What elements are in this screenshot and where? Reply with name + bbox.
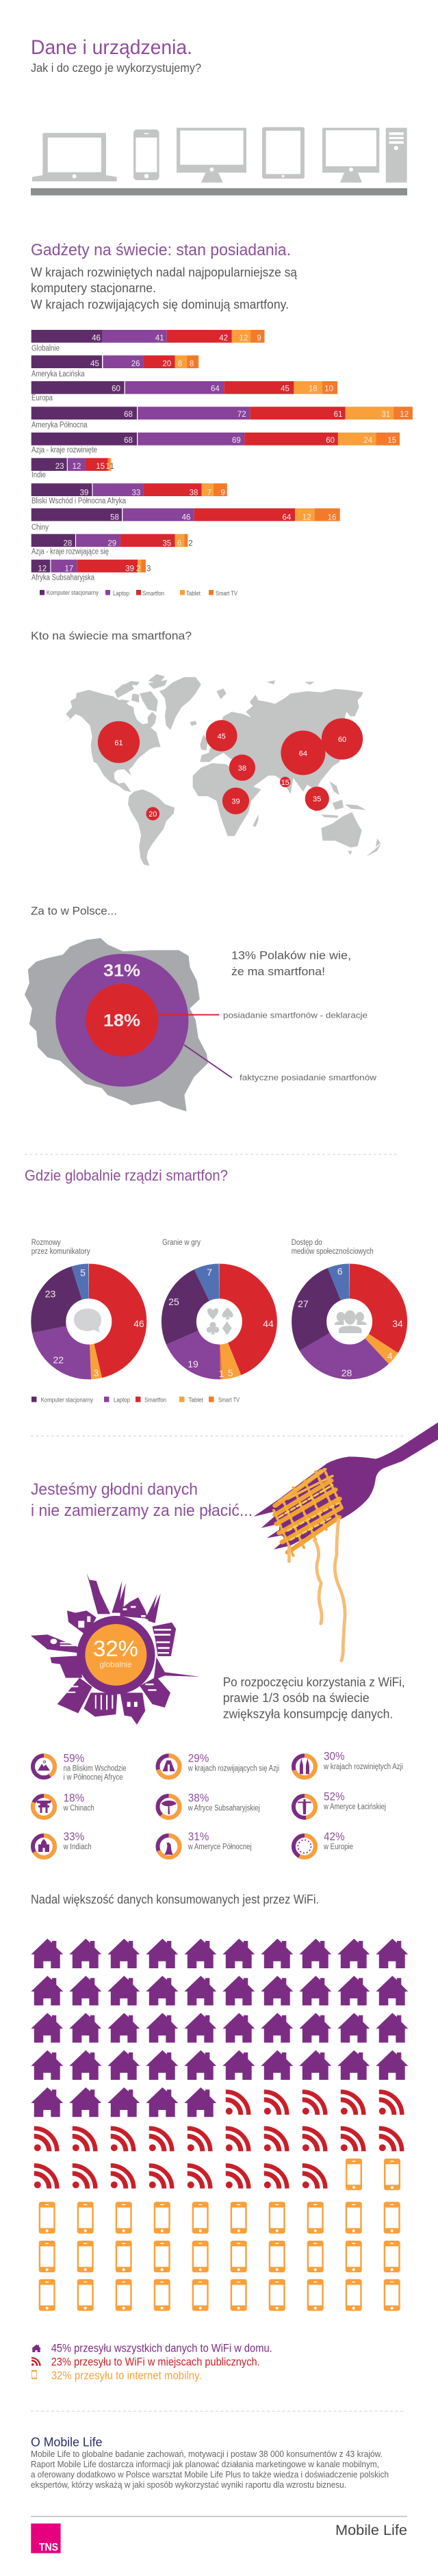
bubble: China 64: [281, 731, 325, 775]
values: 6: [337, 1266, 343, 1277]
illustration: fork with data noodles: [254, 1422, 438, 1661]
hanging strand B: [335, 1519, 345, 1661]
values: 3: [94, 1367, 99, 1378]
row: Ameryka Łacińska: 26: [131, 360, 140, 368]
row: Ameryka Północna: [31, 407, 413, 429]
value: 18%: 18%: [103, 1011, 140, 1030]
row: Ameryka Północna: 12: [400, 411, 409, 419]
stat: 38% Sub-Saharan Africa: 38%: [188, 1792, 209, 1805]
row: Ameryka Północna: Ameryka Północna: [31, 421, 88, 429]
icon: people: [335, 1310, 367, 1333]
logo: TNS: [31, 2523, 61, 2553]
callout: WiFi consumption: [223, 1675, 405, 1721]
row: Chiny: 46: [182, 514, 190, 522]
stacked bar chart: [31, 330, 413, 597]
about text: Raport Mobile Life dostarcza informacji jak planować działania marketingowe w kanale mobilnym,: [31, 2460, 379, 2469]
bubble: developed Asia 60: [322, 719, 363, 760]
bubble: developing Asia 35: 35: [313, 795, 321, 803]
row: Indie: 1: [105, 463, 110, 471]
legend: mobile internet: 32% przesyłu to internet mobilny.: [51, 2369, 202, 2382]
bubble: North America 61: [98, 721, 140, 763]
row: Azja - kraje rozwijające się: 28: [64, 539, 72, 548]
row: Ameryka Północna: 68: [124, 411, 133, 419]
stat: 29% developing Asia: w krajach rozwijających się Azji: [188, 1764, 279, 1773]
row: Ameryka Łacińska: 45: [90, 360, 99, 368]
leader line: declared: [159, 1014, 219, 1016]
row: Bliski Wschód i Północna Afryka: [31, 483, 227, 505]
bar chart legend: Smartfon: [142, 590, 164, 597]
intro paragraph: W krajach rozwijających się dominują smartfony.: [31, 297, 289, 311]
icon: smartphone: [133, 129, 159, 180]
bubble: China 64: 64: [299, 750, 307, 758]
row: Indie: 23: [55, 463, 64, 471]
logo: TNS: TNS: [39, 2542, 58, 2553]
stat: 29% developing Asia: 29%: [188, 1751, 209, 1764]
map: continents: [62, 674, 381, 866]
bubble: developing Asia 35: [305, 786, 329, 811]
icon: card suits: [207, 1307, 233, 1335]
donut label: Rozmowy: [31, 1239, 61, 1247]
donut legend: Smart TV: [218, 1396, 240, 1404]
row: Azja - kraje rozwijające się: 35: [162, 539, 171, 548]
icon: desktop monitor: [177, 128, 246, 183]
bubble: Africa 39: 39: [231, 798, 240, 806]
stat: 30% developed Asia: [294, 1750, 403, 1777]
stat: 38% Sub-Saharan Africa: [157, 1792, 260, 1818]
donut label: przez komunikatory: [31, 1248, 90, 1256]
icon: laptop: [32, 133, 117, 181]
row: Azja - kraje rozwijające się: 2: [188, 539, 193, 548]
Poland diagram: [25, 938, 232, 1111]
row: Azja - kraje rozwinięte: 60: [326, 437, 335, 445]
donut slices: [49, 1281, 129, 1362]
values: 7: [207, 1267, 212, 1278]
value: 32%: 32%: [93, 1636, 138, 1661]
values: 23: [45, 1288, 55, 1299]
row: Indie: 1: [110, 463, 114, 471]
orange disc: [85, 1624, 146, 1686]
fork: [254, 1422, 438, 1549]
world map: [62, 674, 381, 866]
stat: 59% Middle East and North Africa: [33, 1751, 127, 1782]
row: Ameryka Łacińska: 8: [190, 360, 194, 368]
intro paragraph: komputery stacjonarne.: [31, 281, 156, 295]
row: Globalnie: 42: [219, 334, 228, 342]
bubble: South America 20: [146, 807, 159, 821]
landmark window details: [50, 1606, 171, 1710]
row: Afryka Subsaharyjska: 12: [38, 565, 47, 574]
heading: where smartphones rule: Gdzie globalnie rządzi smartfon?: [25, 1167, 228, 1184]
about text: ekspertów, którzy wskażą w jaki sposób wykorzystać wyniki raportu dla wzrostu biznesu.: [31, 2480, 346, 2490]
callout: WiFi consumption: prawie 1/3 osób na świecie: [223, 1690, 370, 1705]
bar chart legend: Laptop: [113, 590, 129, 597]
values: [168, 1267, 274, 1379]
row: Chiny: 64: [283, 514, 292, 522]
stat: 59% Middle East and North Africa: 59%: [64, 1751, 84, 1764]
shelf: [31, 188, 407, 196]
values: 5: [228, 1367, 233, 1378]
row: Azja - kraje rozwijające się: 29: [107, 539, 116, 548]
stat: 59% Middle East and North Africa: na Bliskim Wschodzie: [64, 1764, 127, 1773]
bar chart legend: Tablet: [186, 590, 201, 597]
values: 46: [133, 1318, 144, 1329]
donut slices: [309, 1281, 390, 1362]
heading: who owns a smartphone: Kto na świecie ma smartfona?: [31, 630, 192, 643]
row: Globalnie: 46: [92, 334, 101, 342]
donut label: Dostęp do: [292, 1239, 322, 1247]
values: 1: [219, 1368, 224, 1379]
heading: gadgets: Gadżety na świecie: stan posiadania.: [31, 241, 291, 259]
donut: social media: [292, 1239, 403, 1378]
stat: 31% North America: w Ameryce Północnej: [188, 1843, 252, 1851]
row: Azja - kraje rozwijające się: [31, 534, 193, 556]
row: Azja - kraje rozwijające się: Azja - kraje rozwijające się: [31, 548, 109, 556]
row: Chiny: [31, 508, 340, 532]
about text: Mobile Life to globalne badanie zachowań, motywacji i postaw 38 000 konsumentów z 43 krajów.: [31, 2449, 383, 2459]
about text: a oferowany dodatkowo w Polsce warsztat Mobile Life Plus to także wiedza i doświadczenie polskich: [31, 2470, 389, 2480]
map: Poland: [25, 938, 208, 1111]
donut legend: Komputer stacjonarny: [41, 1396, 93, 1404]
row: Indie: Indie: [31, 472, 46, 480]
callout: WiFi consumption: zwiększyła konsumpcję danych.: [223, 1707, 393, 1721]
icon: desktop computer: [322, 128, 407, 183]
pictogram legend: [31, 2342, 272, 2382]
stat: 42% Europe: w Europie: [323, 1843, 353, 1851]
row: Globalnie: 12: [240, 334, 248, 342]
bubble: Middle East 38: [229, 754, 255, 781]
row: Azja - kraje rozwinięte: Azja - kraje rozwinięte: [31, 446, 97, 454]
stat: 31% North America: 31%: [188, 1830, 209, 1843]
stat: 33% India: [33, 1830, 92, 1857]
row: Ameryka Północna: 31: [381, 411, 390, 419]
callout: 13% of Poles: że ma smartfona!: [231, 965, 325, 978]
wifi signals: 23: [34, 2091, 402, 2189]
heading: hungry for data: i nie zamierzamy za nie płacić...: [31, 1502, 253, 1520]
stat: 29% developing Asia: [157, 1751, 279, 1777]
legend: home WiFi: 45% przesyłu wszystkich danych to WiFi w domu.: [51, 2342, 272, 2355]
row: Afryka Subsaharyjska: Afryka Subsaharyjska: [31, 574, 94, 582]
bubble: Middle East 38: 38: [238, 764, 246, 773]
row: Indie: 12: [73, 463, 81, 471]
stat: 42% Europe: [294, 1830, 353, 1857]
row: Ameryka Łacińska: [31, 355, 198, 378]
donut: games: [162, 1239, 274, 1379]
row: Indie: 15: [96, 463, 105, 471]
values: 22: [53, 1354, 64, 1365]
bubble: developed Asia 60: 60: [338, 736, 346, 744]
stat: 52% Latin America: 52%: [324, 1790, 345, 1803]
row: Afryka Subsaharyjska: 17: [65, 565, 73, 574]
row: Ameryka Północna: 61: [334, 411, 342, 419]
hanging strand A: [314, 1540, 322, 1624]
row: Europa: [31, 381, 337, 402]
heading: hungry for data: [31, 1480, 253, 1520]
pictogram grid: [31, 1939, 408, 2311]
label: actual ownership: faktyczne posiadanie smartfonów: [240, 1072, 376, 1082]
heading: Poland: Za to w Polsce...: [31, 905, 117, 918]
device icons row: [31, 127, 407, 196]
bubble: India 15: [280, 777, 290, 787]
donut label: [292, 1239, 374, 1256]
row: Azja - kraje rozwinięte: 69: [232, 437, 241, 445]
bubble: Europe 45: 45: [218, 732, 226, 740]
stat: 31% North America: [157, 1830, 252, 1857]
row: Azja - kraje rozwinięte: [31, 433, 400, 454]
about text: [31, 2449, 389, 2490]
icon: speech bubble: [74, 1309, 101, 1332]
stat: 18% China: 18%: [64, 1792, 84, 1805]
row: Europa: 60: [112, 385, 120, 393]
bar chart legend: Komputer stacjonarny: [47, 589, 99, 597]
landmarks: [31, 1573, 200, 1725]
row: Afryka Subsaharyjska: [31, 560, 151, 582]
row: Globalnie: 41: [155, 334, 164, 342]
row: Azja - kraje rozwijające się: 6: [177, 539, 181, 548]
row: Bliski Wschód i Północna Afryka: 33: [132, 489, 140, 497]
row: Bliski Wschód i Północna Afryka: Bliski Wschód i Północna Afryka: [31, 497, 127, 505]
donut label: mediów społecznościowych: [292, 1248, 374, 1256]
bar chart legend: [40, 589, 238, 597]
value: 31%: 31%: [103, 962, 140, 981]
row: Chiny: Chiny: [31, 524, 49, 532]
row: Globalnie: 9: [257, 334, 261, 342]
circle: declared ownership: [86, 984, 158, 1057]
row: Chiny: 16: [328, 514, 336, 522]
icon: tablet: [262, 127, 305, 179]
donut label: Granie w gry: [162, 1239, 201, 1247]
stat: 52% Latin America: w Ameryce Łacińskiej: [323, 1803, 386, 1812]
heading: most data over WiFi: Nadal większość danych konsumowanych jest przez WiFi.: [31, 1893, 319, 1907]
donut legend: Tablet: [189, 1396, 203, 1404]
values: 44: [263, 1318, 274, 1329]
donut label: [31, 1239, 90, 1256]
label: globalnie: globalnie: [100, 1660, 132, 1669]
bubble: Europe 45: [206, 720, 237, 751]
stat: 52% Latin America: [294, 1790, 386, 1818]
regional stats grid: [33, 1750, 403, 1857]
row: Ameryka Łacińska: 20: [162, 360, 171, 368]
row: Afryka Subsaharyjska: 39: [125, 565, 134, 574]
row: Azja - kraje rozwinięte: 24: [363, 437, 373, 445]
row: Globalnie: [31, 330, 264, 352]
stat: 18% China: [33, 1792, 94, 1818]
values: 28: [342, 1367, 352, 1378]
row: Europa: Europa: [31, 394, 53, 402]
row: Bliski Wschód i Północna Afryka: 7: [207, 489, 211, 497]
row: Bliski Wschód i Północna Afryka: 9: [221, 489, 225, 497]
intro paragraph: W krajach rozwiniętych nadal najpopularniejsze są: [31, 265, 298, 279]
bubble: South America 20: 20: [149, 810, 157, 819]
row: Europa: 18: [309, 385, 318, 393]
label: declared ownership: posiadanie smartfonów - deklaracje: [223, 1010, 368, 1020]
bubble: Africa 39: [222, 788, 249, 814]
bubble: North America 61: 61: [114, 739, 123, 747]
values: [298, 1266, 403, 1378]
intro paragraph: [31, 265, 298, 311]
houses: 45: [31, 1939, 408, 2117]
callout: 13% of Poles: [231, 949, 351, 978]
subtitle: Jak i do czego je wykorzystujemy?: [31, 61, 201, 75]
row: Europa: 64: [211, 385, 220, 393]
row: Azja - kraje rozwinięte: 68: [124, 437, 133, 445]
stat: 38% Sub-Saharan Africa: w Afryce Subsaharyjskiej: [188, 1805, 260, 1813]
bar chart legend: Smart TV: [216, 590, 238, 597]
row: Azja - kraje rozwinięte: 15: [387, 437, 396, 445]
heading: about Mobile Life: O Mobile Life: [31, 2435, 103, 2449]
noodle tangle: [274, 1469, 345, 1661]
row: Afryka Subsaharyjska: 3: [146, 565, 151, 574]
values: 27: [298, 1298, 309, 1309]
row: Chiny: 58: [110, 514, 119, 522]
donut slices: [179, 1281, 259, 1362]
row: Ameryka Łacińska: 8: [178, 360, 182, 368]
legend: public WiFi: 23% przesyłu to WiFi w miejscach publicznych.: [51, 2356, 260, 2369]
values: 34: [392, 1318, 403, 1329]
stat: 30% developed Asia: 30%: [324, 1750, 345, 1763]
values: 5: [80, 1267, 86, 1278]
donut: messaging: [31, 1239, 144, 1378]
donut legend: Smartfon: [144, 1396, 166, 1404]
row: Europa: 10: [324, 385, 333, 393]
callout: WiFi consumption: Po rozpoczęciu korzystania z WiFi,: [223, 1675, 405, 1689]
row: Chiny: 12: [302, 514, 311, 522]
donut legend: [31, 1396, 240, 1404]
stat: 33% India: w Indiach: [63, 1843, 92, 1851]
values: 25: [168, 1296, 179, 1307]
bubble: India 15: 15: [281, 779, 289, 787]
hanging strand C: [285, 1547, 293, 1562]
values: 19: [188, 1358, 198, 1369]
illustration: globe with landmarks: [31, 1573, 200, 1725]
row: Europa: 45: [281, 385, 289, 393]
row: Bliski Wschód i Północna Afryka: 38: [190, 489, 198, 497]
donut legend: Laptop: [114, 1396, 130, 1404]
callout: 13% of Poles: 13% Polaków nie wie,: [231, 949, 351, 962]
stat: 33% India: 33%: [64, 1830, 84, 1843]
row: Indie: [31, 458, 114, 480]
heading: hungry for data: Jesteśmy głodni danych: [31, 1480, 198, 1499]
wordmark: Mobile Life: Mobile Life: [335, 2522, 407, 2538]
stat: 18% China: w Chinach: [63, 1805, 94, 1813]
phones: 32: [39, 2159, 400, 2311]
stat: 42% Europe: 42%: [324, 1830, 345, 1843]
leader line: actual: [184, 1045, 232, 1078]
stat: 30% developed Asia: w krajach rozwiniętych Azji: [323, 1763, 403, 1771]
stat: 59% Middle East and North Africa: i w Północnej Afryce: [64, 1774, 123, 1782]
title: Dane i urządzenia.: [31, 36, 192, 59]
values: 4: [387, 1350, 393, 1361]
row: Ameryka Północna: 72: [237, 411, 246, 419]
circle: actual ownership: [55, 954, 188, 1087]
row: Ameryka Łacińska: Ameryka Łacińska: [31, 370, 85, 378]
row: Bliski Wschód i Północna Afryka: 39: [80, 489, 88, 497]
row: Globalnie: Globalnie: [31, 344, 60, 352]
row: Afryka Subsaharyjska: 2: [136, 565, 140, 574]
values: [45, 1267, 144, 1378]
